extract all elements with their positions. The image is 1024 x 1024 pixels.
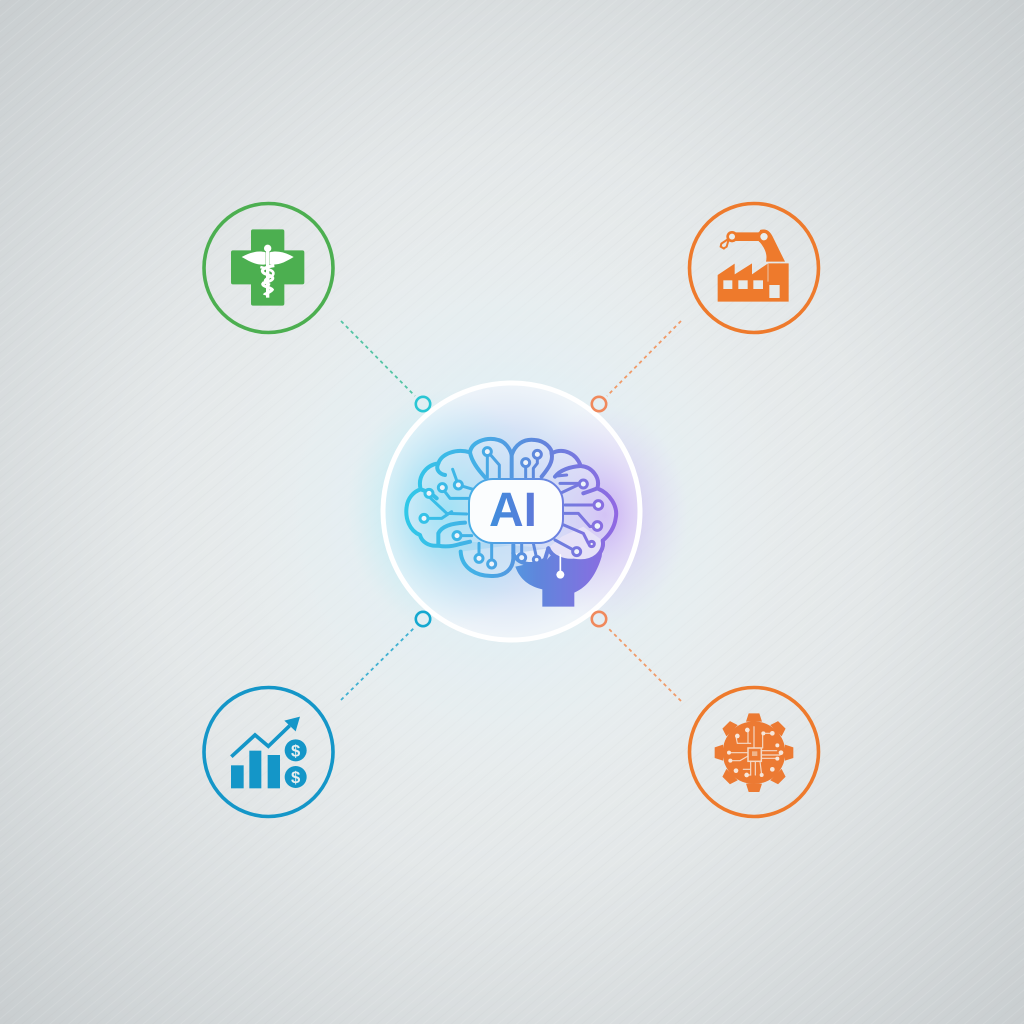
icon: gear with circuit: [715, 713, 793, 792]
icon: medical cross with caduceus: [231, 229, 304, 306]
engineering badge: [690, 688, 818, 816]
connector: engineering to hub: [607, 627, 681, 701]
circuit traces: [425, 455, 598, 563]
icon: growth chart with coins: [231, 717, 307, 788]
connector: healthcare to hub: [341, 321, 415, 396]
hub ring: [383, 383, 640, 640]
AI badge: AI: [489, 484, 537, 537]
healthcare ring: [204, 204, 333, 332]
brain icon: [406, 439, 616, 607]
manufacturing badge: [690, 204, 818, 332]
head silhouette: [515, 530, 603, 607]
central hub: [347, 383, 689, 640]
icon: growth chart with coins: $: [291, 741, 301, 760]
finance badge: [204, 688, 333, 816]
AI badge: [469, 479, 563, 543]
head connector: [556, 555, 564, 579]
circuit nodes: [420, 448, 603, 568]
manufacturing ring: [690, 204, 818, 332]
icon: factory with robot arm: [718, 230, 789, 302]
lower right lobe: [550, 527, 603, 561]
brain lobes: [406, 439, 616, 561]
connector node: top right: [592, 397, 606, 411]
connector node: bottom left: [416, 612, 430, 626]
engineering ring: [690, 688, 818, 816]
finance ring: [204, 688, 333, 816]
connector: manufacturing to hub: [607, 321, 681, 396]
hub glow: [347, 384, 689, 638]
connector: finance to hub: [341, 627, 415, 700]
connector node: bottom right: [592, 612, 606, 626]
connector node: top left: [416, 397, 430, 411]
healthcare badge: [204, 204, 333, 332]
icon: growth chart with coins: $: [291, 768, 301, 787]
